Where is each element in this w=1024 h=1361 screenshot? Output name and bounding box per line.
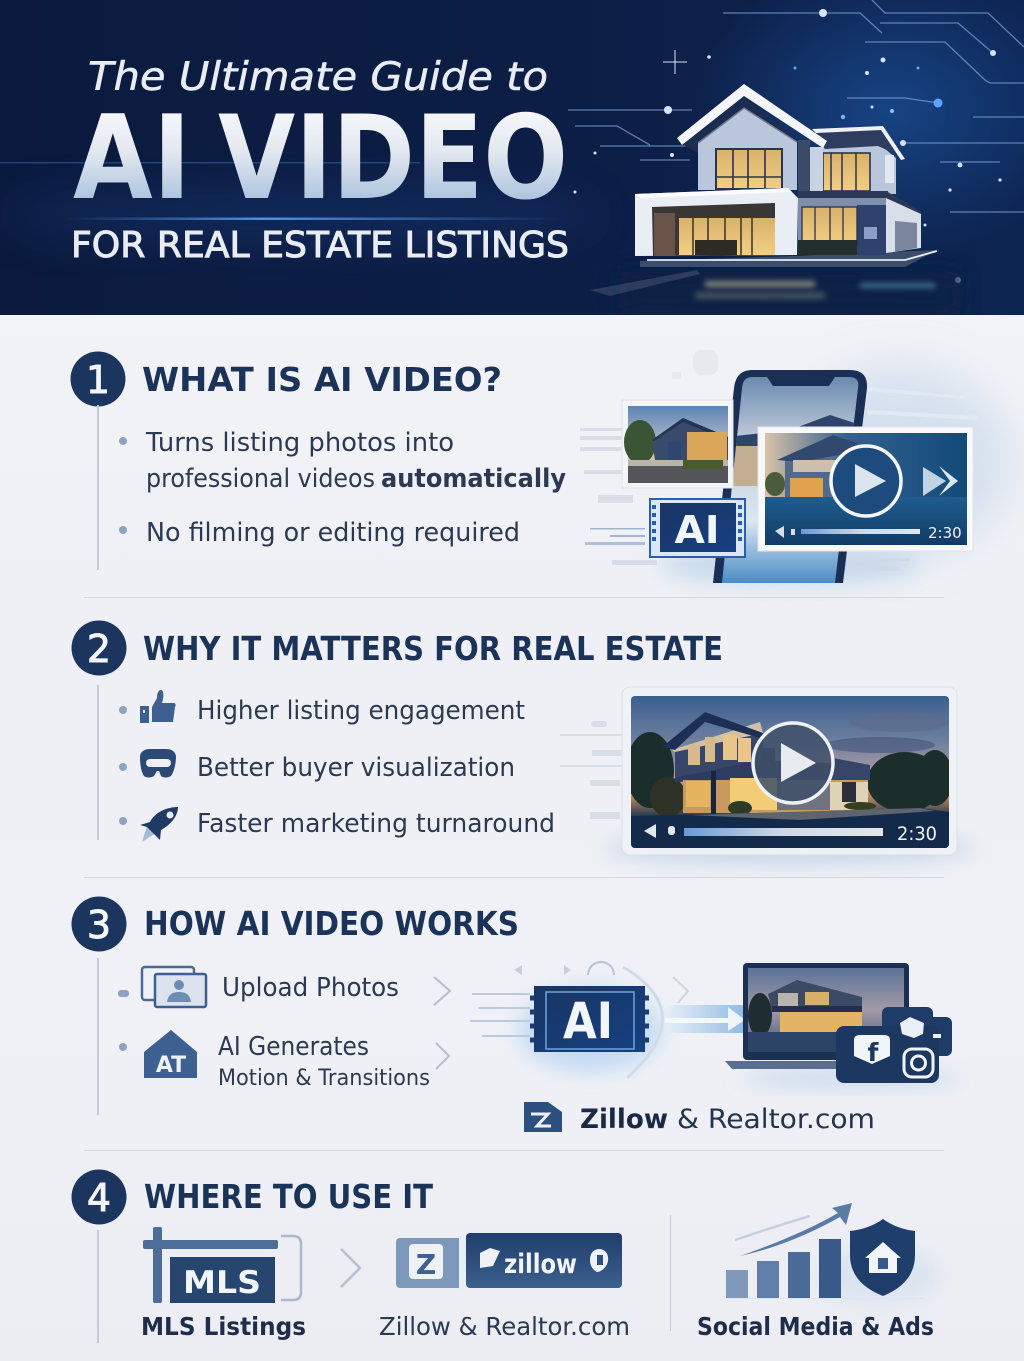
social media tiles	[836, 1007, 952, 1083]
benefit: turnaround: Faster marketing turnaround	[197, 809, 555, 839]
gable	[683, 97, 798, 153]
AI chip	[530, 986, 649, 1052]
right wing	[823, 143, 896, 194]
step: AI generates: AI Generates	[218, 1032, 369, 1062]
lower right	[798, 191, 888, 198]
title: AI VIDEO	[74, 112, 564, 200]
porch box	[635, 188, 798, 256]
trees	[626, 732, 953, 817]
video player card	[758, 427, 973, 551]
AI chip: AI	[563, 992, 613, 1050]
benefit: engagement	[119, 690, 525, 726]
zillow label: Zillow & Realtor.com	[379, 1312, 630, 1341]
section 1 bullet list: Turns listing photos into	[145, 428, 454, 458]
section 4 number badge: 4	[87, 1176, 111, 1220]
diagram: AI chip to laptop and social	[470, 962, 960, 1088]
phone	[713, 370, 870, 583]
step: AI generates: Motion & Transitions	[218, 1066, 430, 1091]
title: the ultimate guide to: The Ultimate Guide to	[88, 55, 548, 100]
step: upload photos: Upload Photos	[222, 973, 399, 1003]
panel: how AI video works	[72, 896, 960, 1135]
section 1 bullet list: professional videos	[146, 464, 375, 494]
zillow badge: zillow	[504, 1249, 577, 1280]
benefit: visualization	[119, 749, 515, 783]
benefit: turnaround	[119, 807, 555, 842]
subtitle: FOR REAL ESTATE LISTINGS	[71, 225, 569, 266]
section 2 number badge: 2	[87, 627, 111, 671]
panel: what is AI video	[70, 350, 1010, 585]
video duration: 2:30	[928, 524, 962, 542]
AI chip	[650, 499, 745, 557]
zillow and realtor label: & Realtor.com	[677, 1104, 875, 1135]
section 1 bullet list: automatically	[381, 464, 566, 494]
header banner	[0, 0, 1024, 315]
zillow badge: Z	[416, 1248, 436, 1281]
section 1 heading: WHAT IS AI VIDEO?	[142, 360, 502, 399]
step: AI generates: AT	[156, 1053, 186, 1078]
panel: where to use it	[72, 1170, 940, 1343]
benefit: visualization: Better buyer visualization	[197, 753, 515, 783]
chevron	[341, 1249, 360, 1287]
section 1 number badge: 1	[86, 358, 110, 402]
step: AI generates	[119, 1030, 449, 1091]
stars	[574, 9, 1002, 283]
section 3 heading: HOW AI VIDEO WORKS	[144, 904, 519, 943]
AI chip: AI	[674, 508, 720, 552]
zillow and realtor label	[524, 1102, 875, 1135]
platform	[640, 250, 937, 267]
social media tiles: f	[868, 1038, 880, 1067]
step: upload photos	[118, 967, 450, 1007]
house in video	[662, 712, 876, 815]
laptop	[725, 963, 909, 1069]
zillow and realtor label: Zillow	[580, 1104, 668, 1135]
panel: why it matters	[72, 620, 975, 864]
MLS label: MLS Listings	[141, 1312, 306, 1341]
section 2 heading: WHY IT MATTERS FOR REAL ESTATE	[143, 629, 723, 668]
section 3 number badge: 3	[87, 903, 111, 947]
house illustration	[590, 84, 960, 315]
social media label: Social Media & Ads	[697, 1312, 934, 1341]
section 4 number badge	[72, 1170, 126, 1224]
MLS sign icon	[143, 1227, 301, 1303]
section 2 number badge	[72, 620, 126, 676]
section 3 number badge	[72, 896, 126, 952]
illustration: video player with house at dusk	[560, 687, 975, 864]
MLS sign icon: MLS	[183, 1265, 261, 1301]
zillow badge	[396, 1233, 622, 1293]
title: AI VIDEO: VIDEO	[218, 91, 568, 226]
video duration: 2:30	[897, 823, 937, 845]
circuit lines	[568, 0, 1024, 212]
section 1 bullet list: No filming or editing required	[146, 518, 520, 548]
growth chart and shield icon	[725, 1203, 940, 1303]
section 4 heading: WHERE TO USE IT	[144, 1177, 433, 1216]
illustration: phone, photo, video player and AI chip	[580, 350, 1010, 585]
title: AI VIDEO: AI	[73, 91, 191, 226]
benefit: engagement: Higher listing engagement	[197, 696, 525, 726]
garage	[886, 197, 921, 253]
photo card	[622, 400, 733, 488]
section 1 bullet list	[119, 428, 566, 548]
section 1 number badge	[70, 352, 126, 406]
